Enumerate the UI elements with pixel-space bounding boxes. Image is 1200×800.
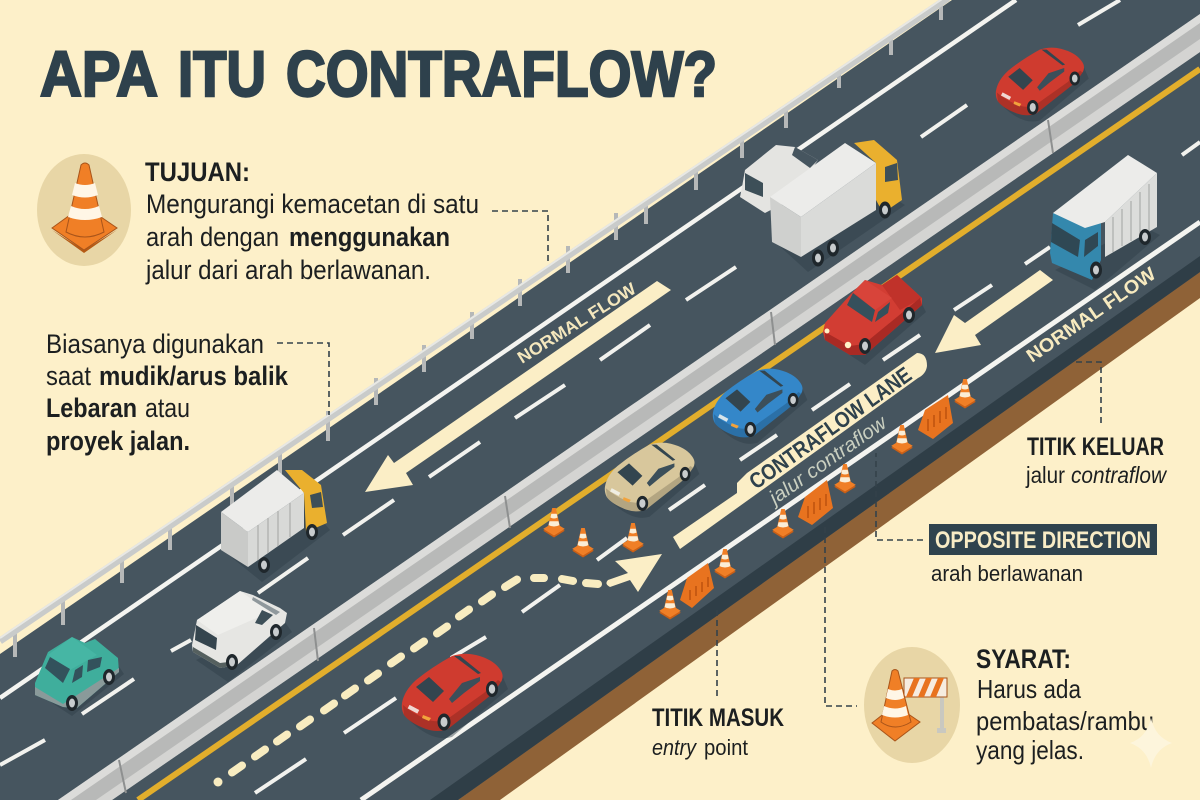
text block: titik masuk bbox=[652, 704, 784, 760]
text block: tujuan bbox=[145, 157, 479, 285]
vehicle: blue sedan bbox=[713, 369, 807, 444]
text block: biasanya digunakan bbox=[46, 329, 289, 456]
vehicle: beige sedan bbox=[605, 443, 699, 518]
text block: syarat: Harus ada bbox=[977, 674, 1081, 704]
title: APA bbox=[40, 38, 158, 110]
vehicle: red pickup bbox=[823, 275, 926, 365]
text block: titik keluar: jalur bbox=[1025, 462, 1065, 488]
text block: titik masuk: TITIK MASUK bbox=[652, 704, 784, 732]
vehicle: white van behind truck bbox=[740, 145, 818, 213]
contraflow lane band bbox=[673, 353, 927, 549]
vehicle: large yellow truck bbox=[770, 140, 905, 272]
text block: opposite direction: OPPOSITE DIRECTION bbox=[935, 527, 1151, 554]
icon: cone and barricade bbox=[864, 647, 960, 763]
text block: syarat: SYARAT: bbox=[976, 644, 1071, 674]
text block: titik keluar: contraflow bbox=[1071, 462, 1167, 488]
text block: tujuan: jalur dari arah berlawanan. bbox=[145, 255, 431, 285]
text block: titik keluar: TITIK KELUAR bbox=[1027, 433, 1164, 461]
road dark side edge bbox=[430, 256, 1200, 800]
outer solid white edge line bbox=[361, 222, 1200, 800]
label: normal flow lower: NORMAL FLOW bbox=[1023, 264, 1160, 367]
label: normal flow upper: NORMAL FLOW bbox=[514, 279, 640, 367]
title: CONTRAFLOW? bbox=[286, 38, 717, 110]
normal flow arrow (upper) bbox=[365, 281, 671, 492]
lower carriageway dashes bbox=[255, 142, 1200, 793]
dashed leader lines bbox=[277, 211, 1101, 706]
watermark sparkle bbox=[1130, 718, 1172, 768]
text block: syarat bbox=[976, 644, 1154, 765]
title bbox=[40, 38, 717, 110]
text block: opposite direction: arah berlawanan bbox=[931, 561, 1083, 586]
orange road barriers bbox=[680, 395, 953, 608]
vehicle: red sedan upper bbox=[996, 48, 1089, 122]
embankment: brown soil edge bbox=[458, 266, 1200, 800]
text block: syarat: pembatas/rambu bbox=[976, 706, 1154, 736]
text block: titik keluar bbox=[1025, 433, 1167, 488]
vehicle: yellow small truck bbox=[221, 470, 330, 582]
label: contraflow lane: CONTRAFLOW LANE bbox=[744, 362, 916, 494]
vehicle: red sedan lower bbox=[402, 654, 508, 738]
title: ITU bbox=[178, 38, 266, 110]
text block: biasanya digunakan: atau bbox=[145, 393, 190, 423]
text block: tujuan: menggunakan bbox=[289, 222, 450, 252]
vehicle: teal car bbox=[35, 637, 124, 716]
text block: biasanya digunakan: Lebaran bbox=[46, 393, 137, 423]
text block: tujuan: TUJUAN: bbox=[145, 157, 250, 187]
text block: biasanya digunakan: saat bbox=[46, 361, 91, 391]
text block: tujuan: arah dengan bbox=[146, 222, 279, 252]
normal flow arrow (lower) bbox=[935, 270, 1053, 353]
icon: traffic cone bbox=[37, 154, 131, 266]
text block: titik masuk: point bbox=[704, 735, 748, 760]
guardrail bbox=[0, 0, 948, 657]
vehicle: white van bbox=[192, 591, 292, 682]
text block: biasanya digunakan: mudik/arus balik bbox=[99, 361, 289, 391]
upper solid white line bbox=[0, 0, 1016, 698]
text block: tujuan: Mengurangi kemacetan di satu bbox=[146, 189, 479, 219]
text block: biasanya digunakan: Biasanya digunakan bbox=[46, 329, 264, 359]
text block: biasanya digunakan: proyek jalan. bbox=[46, 426, 190, 456]
label: jalur contraflow: jalur contraflow bbox=[763, 411, 892, 511]
text block: opposite direction bbox=[929, 524, 1157, 586]
traffic cones bbox=[543, 379, 976, 619]
text block: titik masuk: entry bbox=[652, 735, 698, 760]
text block: syarat: yang jelas. bbox=[976, 735, 1084, 765]
dotted contraflow route with arrow bbox=[214, 554, 662, 786]
vehicle: blue truck bbox=[1050, 155, 1160, 290]
